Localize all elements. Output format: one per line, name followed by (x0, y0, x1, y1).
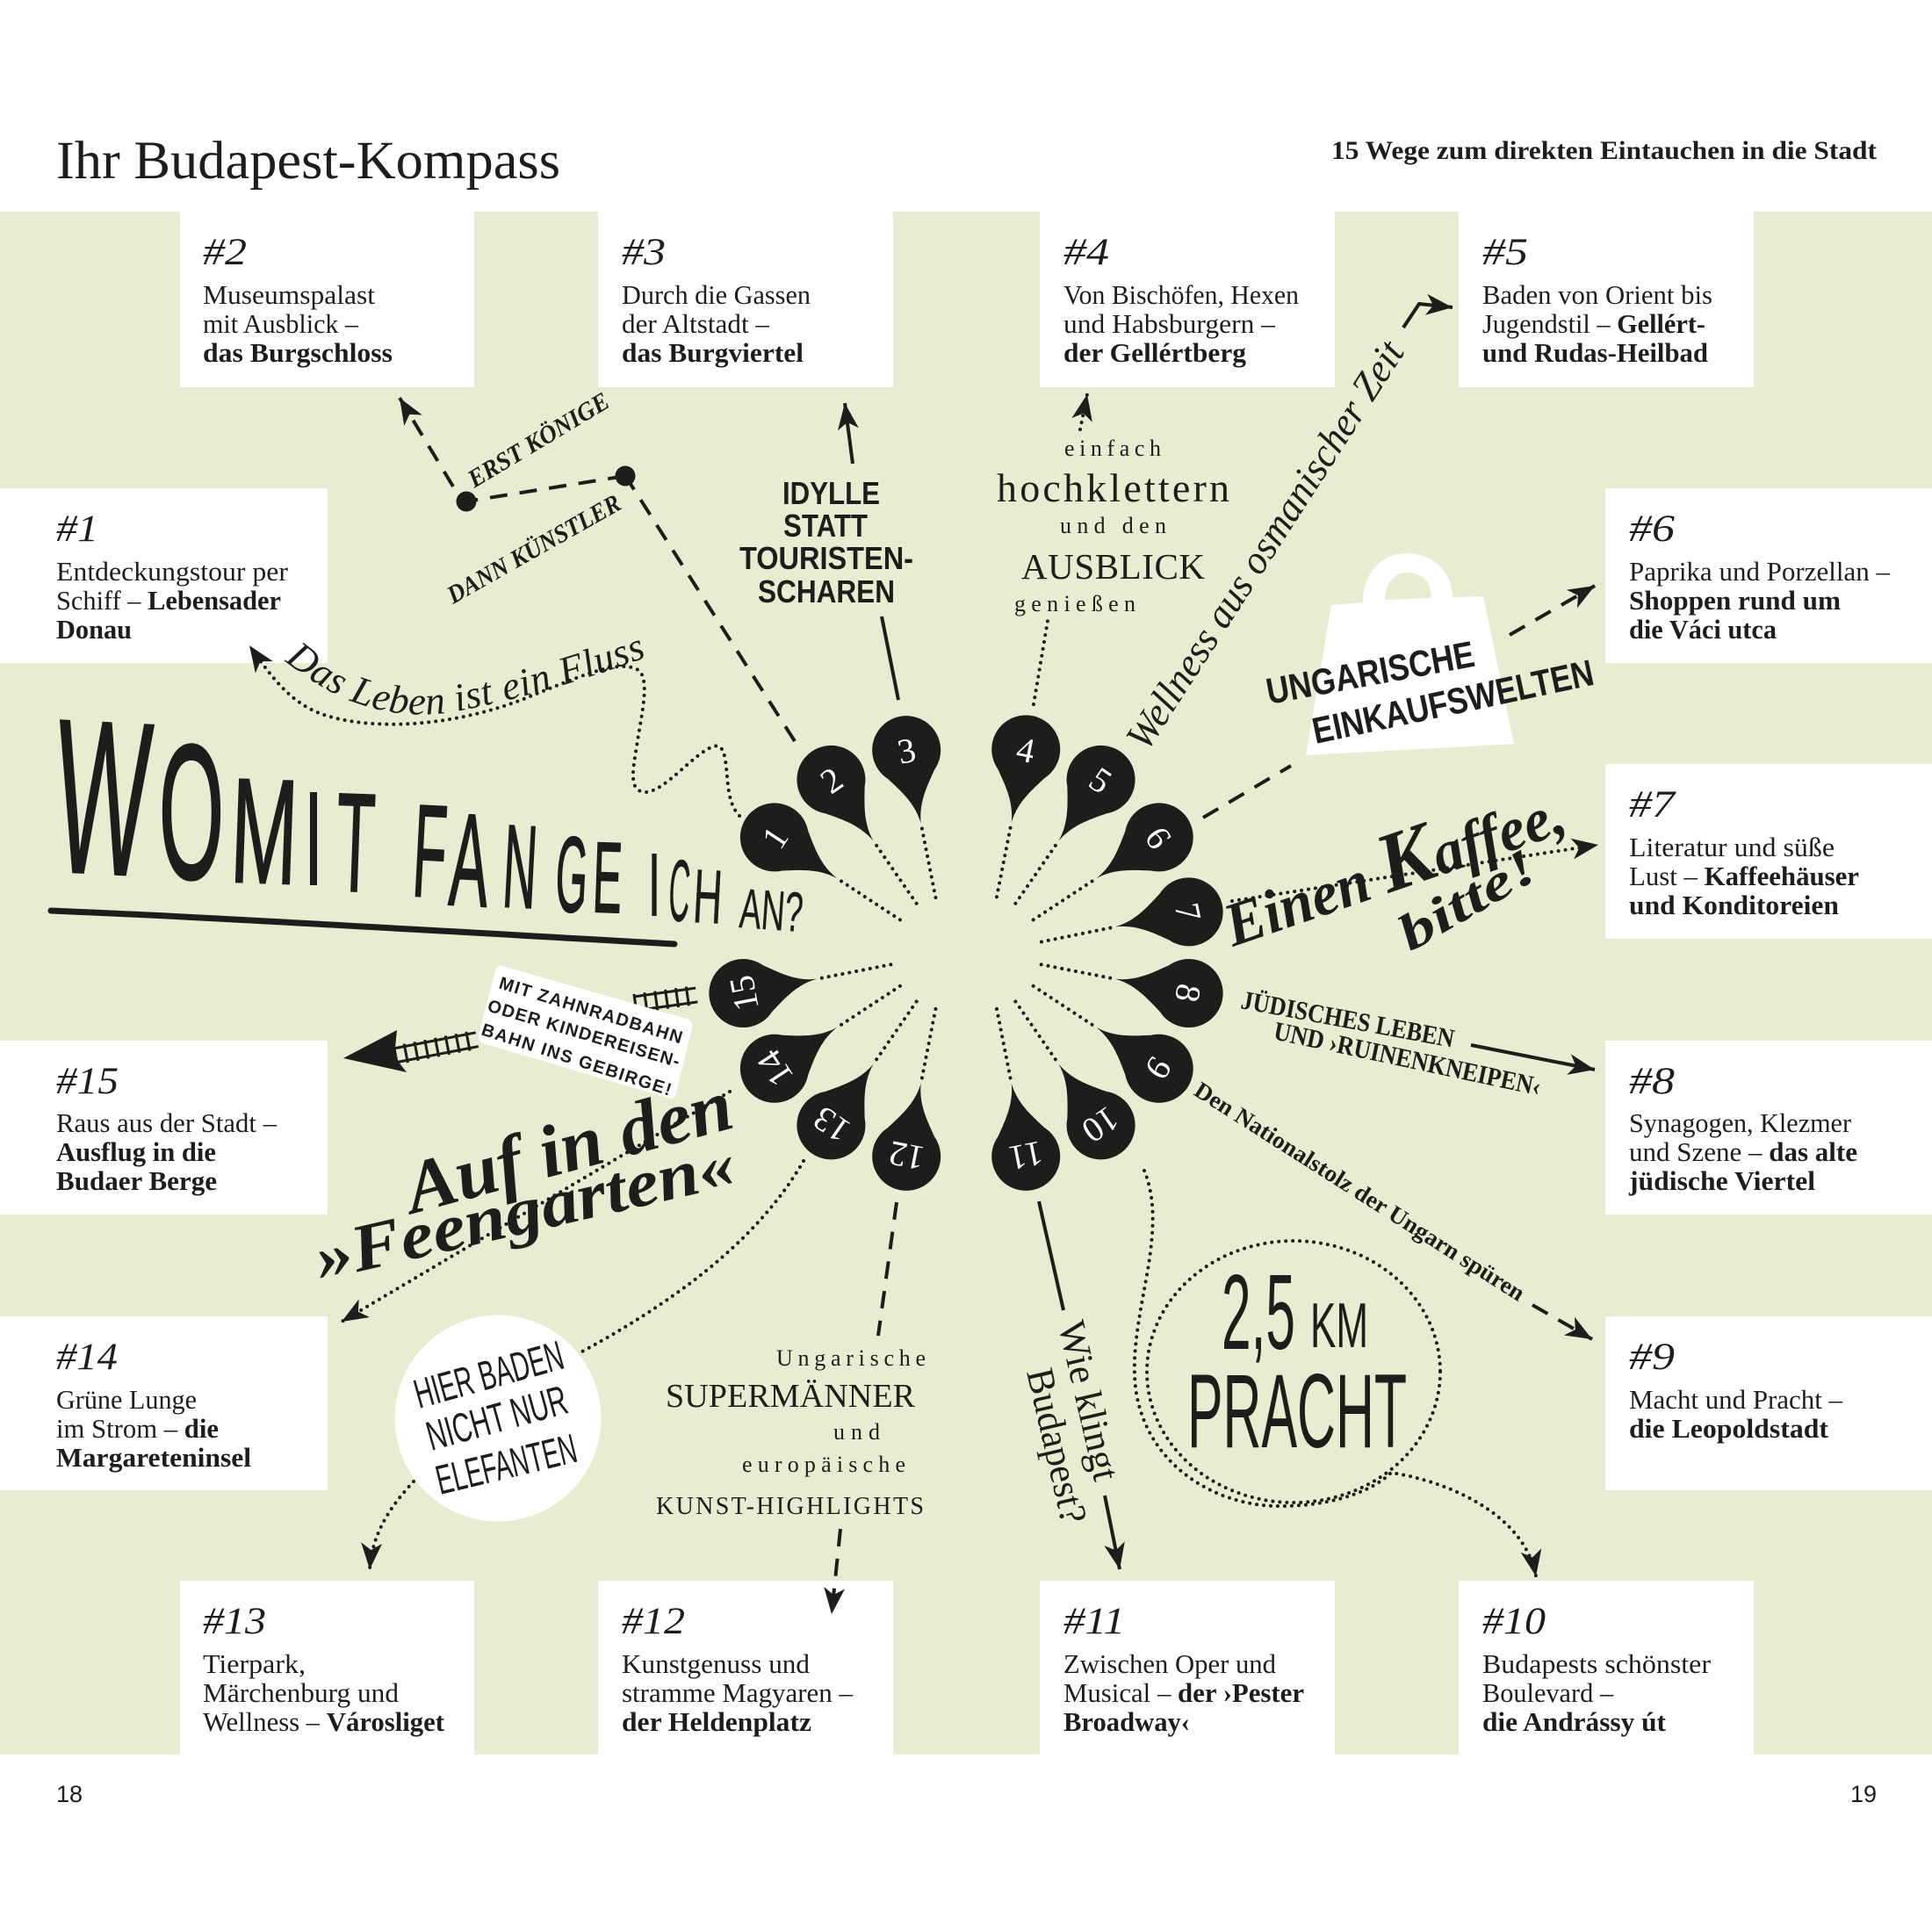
headline: Womit fange ich an?: F (409, 776, 451, 926)
description #9 (1629, 1384, 1842, 1444)
callout: Hier baden nicht nur Elefanten: ELEFANTEN (431, 1424, 581, 1503)
description #2: Museumspalast (203, 279, 375, 310)
callout: 2,5 km Pracht: KM (1310, 1291, 1368, 1361)
description #10: Boulevard – (1482, 1677, 1613, 1708)
callout: Mit Zahnradbahn oder Kindereisenbahn: MIT ZAHNRADBAHN (497, 974, 684, 1048)
description #13: Märchenburg und (203, 1677, 399, 1708)
panel: #7 Kaffeehaeuser (1605, 764, 1932, 939)
description #3: das Burgviertel (622, 337, 804, 368)
number #10: #10 (1482, 1601, 1546, 1642)
description #13: Wellness – Városliget (203, 1706, 445, 1737)
description #11: Zwischen Oper und (1063, 1648, 1276, 1679)
description #7: Lust – Kaffeehäuser (1629, 861, 1859, 891)
callout: Mit Zahnradbahn oder Kindereisenbahn (479, 966, 692, 1100)
arrow: dashed path to #2 with stations (400, 398, 795, 741)
number #4: #4 (1063, 232, 1109, 273)
arrow: to #5 (1403, 304, 1453, 328)
pin 5: 5 (1082, 759, 1119, 802)
pin 10 (984, 977, 1149, 1173)
callout: Hier baden nicht nur Elefanten (395, 1316, 601, 1521)
callout: Ungarische Supermaenner und europaeische Kunst-Highlights (656, 1345, 926, 1520)
panel: #1 Donau (0, 488, 328, 663)
description #3: Durch die Gassen (622, 279, 811, 310)
pin 15: 15 (721, 972, 767, 1014)
callout: Auf in den Feengarten: Auf in den (392, 1064, 741, 1231)
label: Dann Kuenstler: DANN KÜNSTLER (442, 489, 626, 610)
page number 19: 19 (1850, 1781, 1877, 1807)
description #3 (622, 279, 811, 368)
callout: Auf in den Feengarten: »Feengarten« (306, 1127, 742, 1295)
number #9: #9 (1629, 1337, 1675, 1378)
headline: Womit fange ich an?: AN? (738, 876, 805, 944)
pin 10: 10 (1075, 1099, 1126, 1151)
description #6: Paprika und Porzellan – (1629, 556, 1890, 587)
description #10: die Andrássy út (1482, 1706, 1667, 1737)
description #9: die Leopoldstadt (1629, 1413, 1829, 1444)
description #8: Synagogen, Klezmer (1629, 1107, 1852, 1138)
description #2: das Burgschloss (203, 337, 393, 368)
callout: Mit Zahnradbahn oder Kindereisenbahn: ODER KINDEREISEN- (486, 997, 681, 1071)
description #6 (1629, 556, 1890, 645)
arrow: dashed to #6 (1510, 586, 1595, 635)
description #14: Margareteninsel (56, 1442, 251, 1473)
callout: Wie klingt Budapest?: Wie klingt (1049, 1316, 1128, 1485)
icon: shopping bag (1306, 553, 1514, 755)
number #5: #5 (1482, 232, 1528, 273)
callout: Einen Kaffee, bitte!: bitte! (1388, 837, 1546, 962)
label: Erst Koenige: ERST KÖNIGE (462, 387, 615, 494)
panel: #15 Budaer Berge (0, 1041, 328, 1215)
description #15: Raus aus der Stadt – (56, 1107, 277, 1138)
description #4 (1063, 279, 1299, 368)
callout: Idylle statt Touristenscharen: IDYLLE (782, 475, 880, 511)
callout: Ungarische Supermaenner und europaeische Kunst-Highlights: und (833, 1419, 880, 1445)
pin 13: 13 (806, 1099, 857, 1151)
description #10 (1482, 1648, 1712, 1737)
arrow: line from pin 11 (1039, 1201, 1063, 1310)
description #1: Entdeckungstour per (56, 556, 289, 587)
arrow: to #11 (1105, 1496, 1120, 1569)
description #7 (1629, 832, 1859, 920)
panel: #3 Burgviertel (598, 212, 893, 387)
description #15: Ausflug in die (56, 1136, 216, 1167)
callout: einfach hochklettern und den Ausblick geniessen: genießen (1014, 591, 1135, 616)
description #12 (622, 1648, 853, 1737)
description #5: und Rudas-Heilbad (1482, 337, 1708, 368)
description #12: stramme Magyaren – (622, 1677, 853, 1708)
pin 1 (727, 789, 924, 952)
headline: Womit fange ich an?: I (647, 834, 661, 935)
arrow: dashed from pin 6 (1203, 766, 1291, 818)
callout: einfach hochklettern und den Ausblick geniessen: AUSBLICK (1021, 546, 1205, 587)
headline: Womit fange ich an?: O (159, 706, 224, 919)
description #14: Grüne Lunge (56, 1384, 197, 1415)
description #10: Budapests schönster (1482, 1648, 1712, 1679)
panel: #12 Heldenplatz (598, 1581, 893, 1755)
callout ring: dotted circle (1147, 1241, 1440, 1503)
arrow: dotted to #14 (342, 1092, 730, 1322)
description #7: Literatur und süße (1629, 832, 1835, 862)
callout: Ungarische Supermaenner und europaeische Kunst-Highlights: Ungarische (776, 1345, 926, 1371)
description #2: mit Ausblick – (203, 308, 358, 339)
number #1: #1 (56, 508, 98, 550)
description #9: Macht und Pracht – (1629, 1384, 1842, 1415)
callout: Ungarische Supermaenner und europaeische Kunst-Highlights: KUNST-HIGHLIGHTS (656, 1493, 924, 1520)
callout: Mit Zahnradbahn oder Kindereisenbahn: BAHN INS GEBIRGE! (479, 1020, 674, 1100)
number #13: #13 (203, 1601, 266, 1642)
description #15: Budaer Berge (56, 1165, 217, 1196)
pin 9 (1009, 954, 1207, 1116)
title: Ihr Budapest-Kompass (56, 132, 560, 191)
panel: #10 Andrassy ut (1459, 1581, 1754, 1755)
headline: Womit fange ich an?: I (303, 763, 324, 914)
description #7: und Konditoreien (1629, 890, 1839, 920)
headline: Womit fange ich an?: T (334, 763, 378, 922)
pin 1: 1 (753, 819, 797, 855)
description #11: Broadway‹ (1063, 1706, 1190, 1737)
pin 3: 3 (894, 730, 919, 772)
callout: Wie klingt Budapest? (1018, 1316, 1128, 1528)
description #4: und Habsburgern – (1063, 308, 1276, 339)
pin 13 (783, 977, 948, 1173)
description #14: im Strom – die (56, 1413, 219, 1444)
pin 5 (984, 732, 1149, 928)
pin 12 (866, 997, 970, 1197)
pin 11: 11 (1006, 1133, 1046, 1179)
arrow: line from pin 3 (882, 616, 898, 700)
arrow: to #3 (845, 403, 853, 464)
callout: Ungarische Einkaufswelten: UNGARISCHE (1263, 633, 1478, 712)
callout: 2,5 km Pracht: 2,5 (1222, 1252, 1295, 1372)
page number 18: 18 (56, 1781, 83, 1807)
callout: Ungarische Supermaenner und europaeische Kunst-Highlights: europäische (742, 1452, 905, 1477)
description #1: Schiff – Lebensader (56, 585, 281, 616)
arrow: dotted from pin 4 (1034, 621, 1048, 704)
callout: einfach hochklettern und den Ausblick geniessen: hochklettern (997, 465, 1229, 510)
callout: Juedisches Leben und Ruinenkneipen: JÜDISCHES LEBEN (1239, 985, 1457, 1054)
panel: #6 Vaci utca (1605, 488, 1932, 663)
pin 8: 8 (1167, 981, 1209, 1006)
description #11: Musical – der ›Pester (1063, 1677, 1304, 1708)
description #6: Shoppen rund um (1629, 585, 1841, 616)
headline: Womit fange ich an?: H (691, 854, 724, 941)
description #5: Baden von Orient bis (1482, 279, 1712, 310)
arrow: to #8 (1471, 1045, 1595, 1070)
pin 6 (1009, 789, 1207, 952)
panel: #13 Varosliget (180, 1581, 474, 1755)
headline: Womit fange ich an? (49, 673, 805, 944)
number #3: #3 (622, 232, 666, 273)
pin 2 (783, 732, 948, 928)
panel: #9 Leopoldstadt (1605, 1316, 1932, 1490)
pin 14: 14 (749, 1042, 801, 1093)
callout: 2,5 km Pracht: PRACHT (1187, 1352, 1407, 1470)
number #15: #15 (56, 1061, 119, 1102)
arrow: dotted river path to #1 (249, 645, 739, 816)
subtitle: 15 Wege zum direkten Eintauchen in die Stadt (1331, 136, 1877, 165)
callout: Wellness aus osmanischer Zeit: Wellness aus osmanischer Zeit (1117, 331, 1413, 757)
callout: Juedisches Leben und Ruinenkneipen: UND ›RUINENKNEIPEN‹ (1272, 1017, 1544, 1101)
callout: Auf in den Feengarten (306, 1064, 742, 1295)
callout: 2,5 km Pracht (1187, 1252, 1407, 1470)
arrow: dotted to #7 (1232, 845, 1598, 901)
callout: Idylle statt Touristenscharen: SCHAREN (758, 573, 895, 609)
pin 15 (703, 930, 904, 1034)
callout: Ungarische Einkaufswelten: EINKAUFSWELTEN (1308, 652, 1597, 752)
pin 12: 12 (885, 1133, 927, 1179)
headline: Womit fange ich an?: N (500, 801, 540, 934)
number #6: #6 (1629, 508, 1676, 550)
pin 7 (1028, 871, 1229, 977)
pin 7: 7 (1167, 899, 1209, 925)
callout: Juedisches Leben und Ruinenkneipen (1239, 985, 1544, 1101)
compass: 15 numbered pins (703, 710, 1229, 1197)
callout: einfach hochklettern und den Ausblick geniessen: und den (1060, 513, 1166, 538)
panel: #4 Gellertberg (1040, 212, 1335, 387)
pin 11 (962, 997, 1066, 1197)
panel: #8 juedisches Viertel (1605, 1041, 1932, 1215)
callout: Idylle statt Touristenscharen: STATT (783, 508, 868, 544)
description #14 (56, 1384, 251, 1473)
description #4: der Gellértberg (1063, 337, 1246, 368)
pin 4 (962, 710, 1066, 910)
callout: Hier baden nicht nur Elefanten: HIER BADEN (409, 1331, 568, 1417)
panel: #2 Burgschloss (180, 212, 474, 387)
arrow: dotted from pin 13 to elephant circle (582, 1161, 804, 1352)
headline: Womit fange ich an?: C (667, 841, 693, 941)
arrow: dotted to #13 (370, 1481, 414, 1569)
panel: #14 Margareteninsel (0, 1316, 328, 1490)
callout: Idylle statt Touristenscharen (739, 475, 913, 609)
pin 9: 9 (1137, 1050, 1179, 1086)
description #13: Tierpark, (203, 1648, 306, 1679)
pin 6: 6 (1137, 819, 1179, 855)
arrow: dashed from pin 12 (878, 1202, 897, 1336)
pin 8 (1028, 930, 1229, 1034)
description #8 (1628, 1107, 1857, 1196)
headline underline (51, 911, 674, 944)
description #3: der Altstadt – (622, 308, 769, 339)
pin 2: 2 (813, 759, 850, 802)
description #8: und Szene – das alte (1629, 1136, 1857, 1167)
description #13 (203, 1648, 445, 1737)
pin 3 (866, 710, 970, 910)
arrow: dotted to #4 (1080, 394, 1087, 429)
callout: Idylle statt Touristenscharen: TOURISTEN- (739, 540, 913, 576)
number #7: #7 (1629, 784, 1676, 825)
callout: Wie klingt Budapest?: Budapest? (1018, 1364, 1095, 1528)
description #12: Kunstgenuss und (622, 1648, 811, 1679)
callout: einfach hochklettern und den Ausblick geniessen (997, 436, 1229, 616)
description #6: die Váci utca (1629, 614, 1777, 645)
pin 4: 4 (1013, 729, 1038, 771)
description #5 (1482, 279, 1712, 368)
arrow: dashed to #12 (832, 1529, 840, 1614)
callout: Ungarische Supermaenner und europaeische Kunst-Highlights: SUPERMÄNNER (666, 1378, 916, 1415)
callout: Das Leben ist ein Fluss: Das Leben ist ein Fluss (285, 640, 644, 715)
pin 14 (727, 954, 924, 1116)
callout: Hier baden nicht nur Elefanten: NICHT NUR (422, 1376, 573, 1460)
number #8: #8 (1629, 1061, 1676, 1102)
panel: #11 Pester Broadway (1040, 1581, 1335, 1755)
headline: Womit fange ich an?: A (446, 785, 493, 934)
description #4: Von Bischöfen, Hexen (1063, 279, 1299, 310)
description #8: jüdische Viertel (1628, 1165, 1815, 1196)
callout: Einen Kaffee, bitte!: Einen Kaffee, (1208, 760, 1575, 964)
callout: einfach hochklettern und den Ausblick geniessen: einfach (1064, 436, 1161, 461)
headline: Womit fange ich an?: W (49, 673, 157, 923)
description #5: Jugendstil – Gellért- (1482, 308, 1705, 339)
number #2: #2 (203, 232, 247, 273)
number #14: #14 (56, 1337, 118, 1378)
headline: Womit fange ich an?: E (591, 822, 624, 934)
description #1 (56, 556, 289, 645)
description #2 (203, 279, 393, 368)
headline: Womit fange ich an?: G (553, 814, 591, 935)
panel: #5 Heilbad (1459, 212, 1754, 387)
headline: Womit fange ich an?: M (228, 747, 300, 917)
description #11 (1063, 1648, 1304, 1737)
icon: rack railway arrow (343, 988, 697, 1072)
description #15 (56, 1107, 277, 1196)
number #11: #11 (1063, 1601, 1125, 1642)
number #12: #12 (622, 1601, 685, 1642)
arrow: dotted to #10 (1135, 1171, 1536, 1576)
callout: Den Nationalstolz der Ungarn spueren: Den Nationalstolz der Ungarn spüren (1190, 1077, 1530, 1306)
arrow: dashed to #9 (1532, 1305, 1592, 1339)
description #1: Donau (56, 614, 132, 645)
description #12: der Heldenplatz (622, 1706, 811, 1737)
